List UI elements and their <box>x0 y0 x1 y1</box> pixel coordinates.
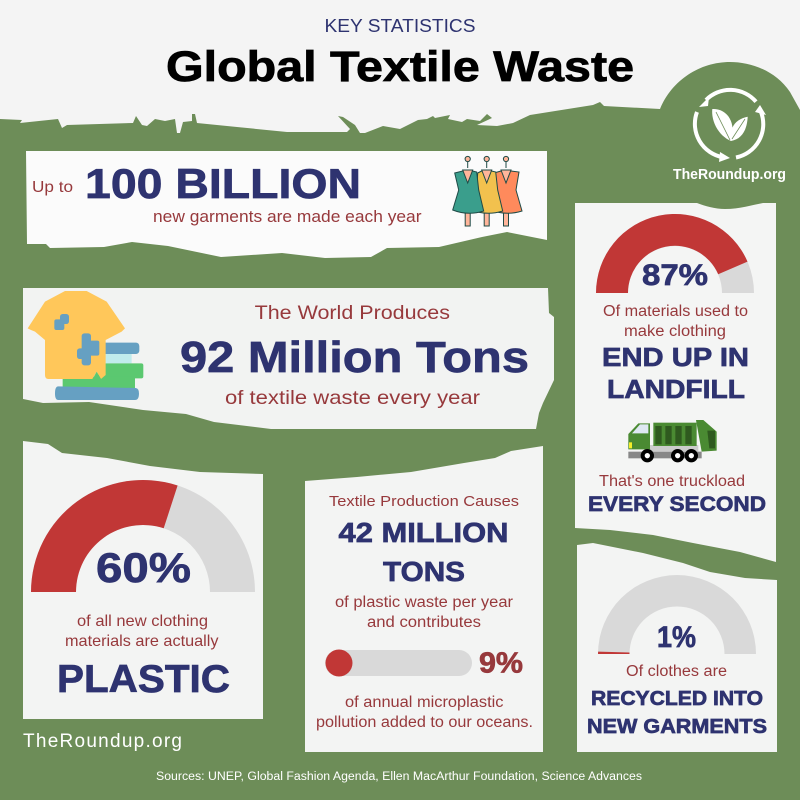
stat: end up in landfill: END UP IN <box>602 342 749 372</box>
panel: 60% plastic <box>23 441 263 719</box>
stat: plastic: PLASTIC <box>57 658 230 701</box>
stat: 42 million tons <box>338 517 508 587</box>
gauge: 87 percent <box>596 214 754 293</box>
eyebrow heading: KEY STATISTICS <box>324 16 476 36</box>
footer brand: TheRoundup.org <box>23 731 182 752</box>
text: world produces: The World Produces <box>255 302 450 324</box>
logo: TheRoundup.org <box>673 90 786 183</box>
stat: 60%: 60% <box>96 544 191 591</box>
stat: 42 million tons: 42 MILLION <box>338 517 508 548</box>
text: plastic waste: and contributes <box>367 614 481 631</box>
text: of clothes: Of clothes are <box>626 663 727 680</box>
stat: 100 billion: 100 BILLION <box>85 160 361 207</box>
text: production causes: Textile Production Causes <box>329 493 519 510</box>
text: materials used <box>603 303 748 340</box>
panel: 92 million tons <box>23 288 554 429</box>
stat: 9%: 9% <box>479 648 523 680</box>
text: microplastic pollution <box>316 694 533 731</box>
text: textile waste: of textile waste every year <box>225 387 481 409</box>
header torn paper band <box>0 0 800 133</box>
text: plastic waste: of plastic waste per year <box>335 594 513 611</box>
logo wordmark: TheRoundup.org <box>673 167 786 183</box>
progress bar: 9 percent <box>325 650 472 676</box>
title: Global Textile Waste <box>166 43 634 91</box>
panel: 1% recycled <box>577 543 777 752</box>
stat: 87%: 87% <box>642 259 708 292</box>
text: clothing materials <box>65 613 218 650</box>
stat: end up in landfill: LANDFILL <box>607 374 745 404</box>
panel: 100 billion garments <box>26 151 547 258</box>
stat: end up in landfill <box>602 342 749 404</box>
panel: 42 million tons <box>305 446 543 752</box>
icon: garbage truck <box>628 420 717 460</box>
text: clothing materials: of all new clothing <box>77 613 208 630</box>
text: microplastic pollution: of annual microplastic <box>345 694 504 711</box>
gauge: 1 percent <box>598 575 756 654</box>
text: clothing materials: materials are actually <box>65 633 218 650</box>
stat: recycled into new garments: RECYCLED INTO <box>591 687 763 710</box>
text: new garments: new garments are made each year <box>153 207 422 226</box>
stat: recycled into new garments <box>587 687 767 738</box>
stat: recycled into new garments: NEW GARMENTS <box>587 715 767 738</box>
sources footnote: Sources: UNEP, Global Fashion Agenda, Ellen MacArthur Foundation, Science Advances <box>156 771 642 783</box>
icon: recycling ring with leaves <box>695 90 766 162</box>
stat: every second: EVERY SECOND <box>588 493 766 516</box>
text: one truckload: That's one truckload <box>599 473 745 490</box>
text: up to: Up to <box>32 179 73 196</box>
stat: 42 million tons: TONS <box>383 556 465 587</box>
text: plastic waste <box>335 594 513 631</box>
text: materials used: Of materials used to <box>603 303 748 320</box>
panel: 87% landfill <box>575 203 776 562</box>
stat: 1%: 1% <box>657 621 696 654</box>
header <box>166 16 634 91</box>
icon: three dresses <box>453 156 522 226</box>
gauge: 60 percent <box>31 480 255 592</box>
text: microplastic pollution: pollution added to our oceans. <box>316 714 533 731</box>
icon: shirt and stacked fabric <box>28 291 143 400</box>
text: materials used: make clothing <box>624 323 726 340</box>
stat: 92 million tons: 92 Million Tons <box>180 333 529 382</box>
